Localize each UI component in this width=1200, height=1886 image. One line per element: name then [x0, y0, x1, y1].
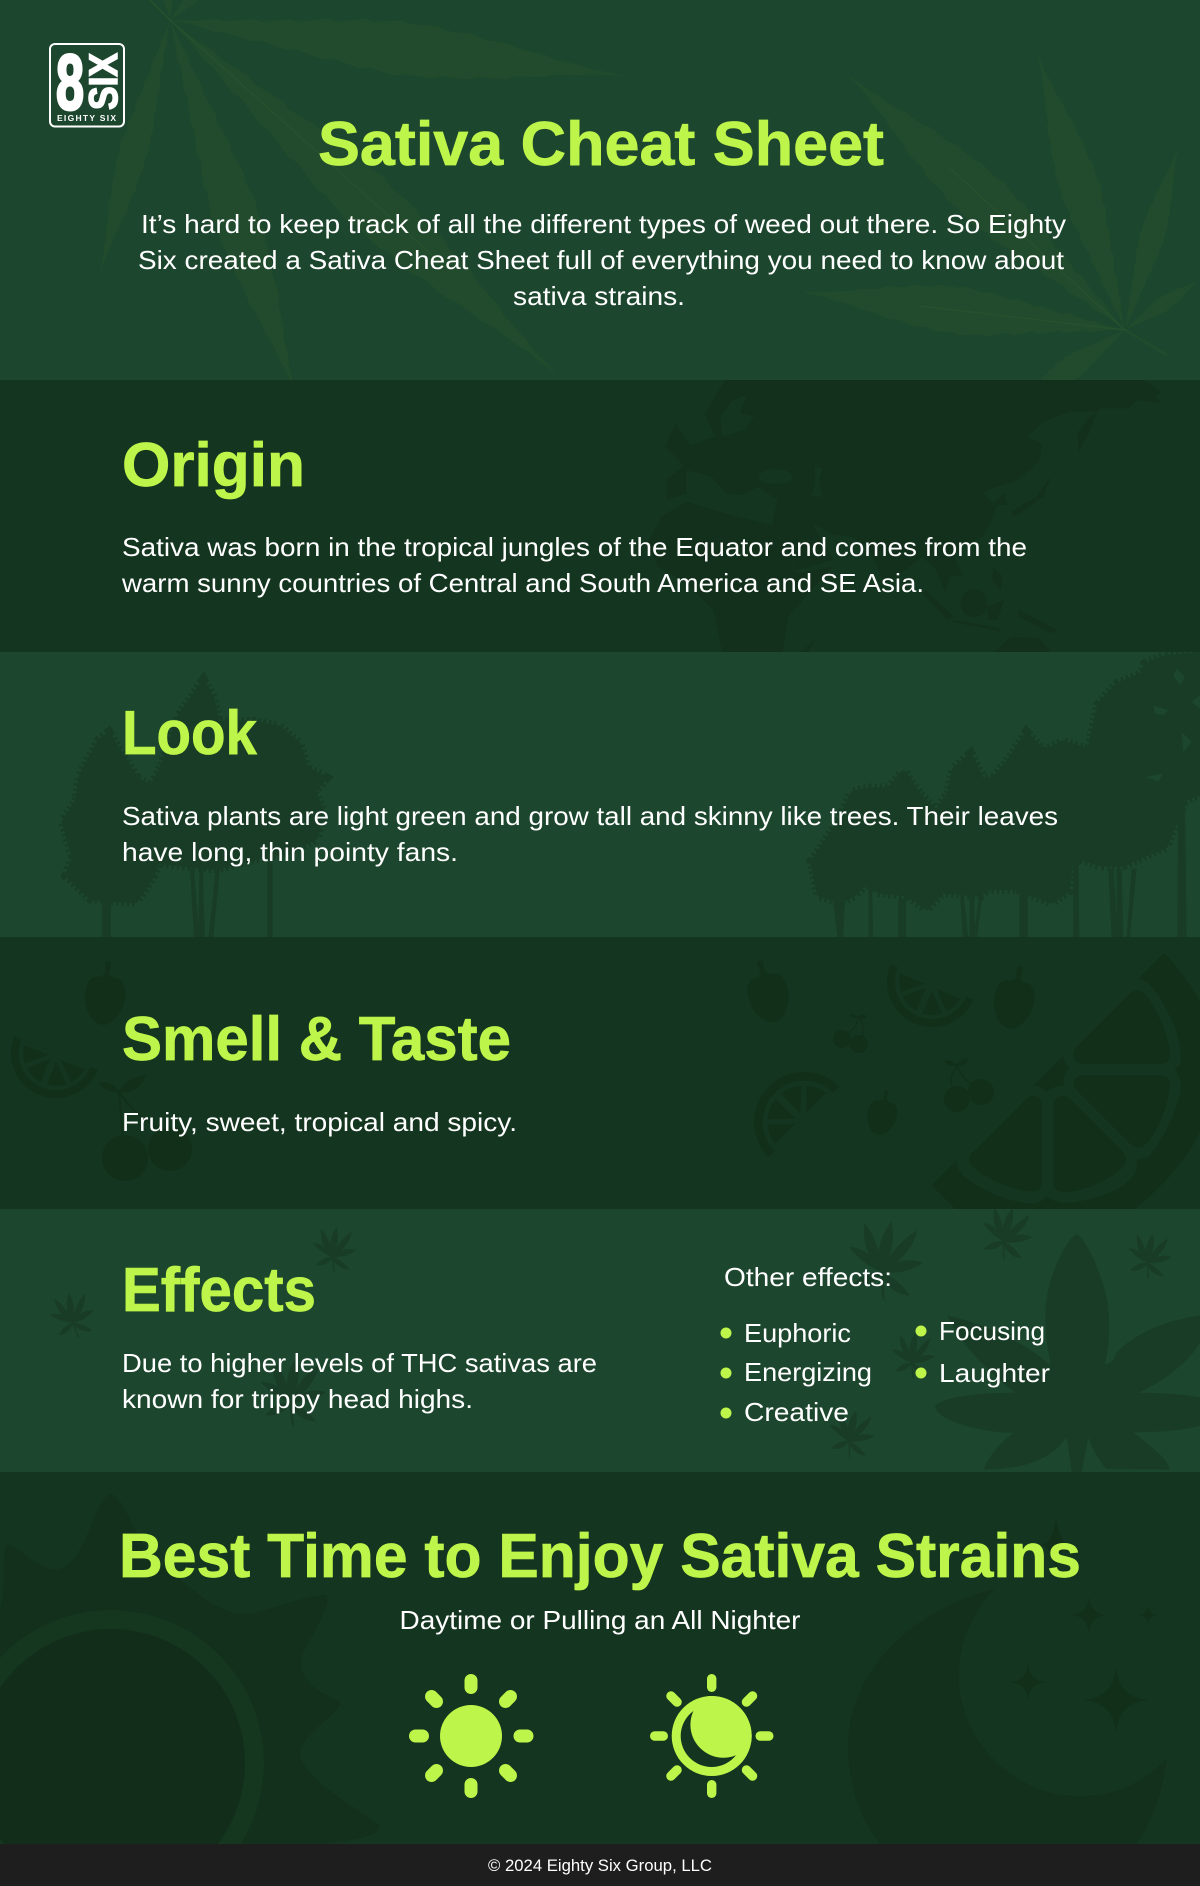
heading: Effects	[122, 1256, 316, 1325]
other effects list: Creative	[744, 1397, 849, 1427]
panel: smell and taste	[0, 937, 1200, 1209]
icon: sun	[409, 1674, 534, 1798]
other effects list: Focusing	[939, 1316, 1045, 1346]
background: sun and moon	[0, 1494, 1167, 1886]
subheading: Daytime or Pulling an All Nighter	[400, 1605, 801, 1635]
body text: Sativa plants are light green and grow tall and skinny like trees. Their leaves	[122, 801, 1058, 831]
heading: Smell & Taste	[122, 1005, 511, 1074]
heading: Best Time to Enjoy Sativa Strains	[119, 1522, 1081, 1591]
other effects list	[720, 1262, 1050, 1427]
footer	[0, 1844, 1200, 1886]
background: cannabis leaves	[85, 0, 1200, 415]
intro text: Six created a Sativa Cheat Sheet full of everything you need to know about	[138, 245, 1065, 275]
body text: Fruity, sweet, tropical and spicy.	[122, 1107, 517, 1137]
icon: sun with moon	[650, 1674, 774, 1798]
heading: Origin	[122, 431, 305, 500]
body text: Sativa was born in the tropical jungles of the Equator and comes from the	[122, 532, 1027, 562]
intro text	[138, 209, 1066, 311]
background: cannabis leaf icons	[47, 1203, 1200, 1472]
panel: effects	[0, 1203, 1200, 1472]
other effects list: Euphoric	[744, 1318, 851, 1348]
intro text: sativa strains.	[513, 281, 685, 311]
panel: look	[0, 652, 1200, 937]
body text	[121, 532, 1027, 598]
background: fruit	[425, 1765, 757, 1779]
background: trees	[65, 655, 1200, 937]
panel: origin	[0, 380, 1200, 652]
body text	[122, 1348, 597, 1414]
body text: known for trippy head highs.	[122, 1384, 473, 1414]
body text: have long, thin pointy fans.	[122, 837, 458, 867]
title: Sativa Cheat Sheet	[318, 110, 884, 179]
heading: Look	[122, 699, 257, 768]
other effects list: Other effects:	[724, 1262, 892, 1292]
body text: Due to higher levels of THC sativas are	[122, 1348, 597, 1378]
other effects list: Energizing	[744, 1357, 872, 1387]
panel: best time	[0, 1472, 1200, 1844]
body text	[122, 801, 1058, 867]
panel: header	[49, 0, 1125, 330]
body text: warm sunny countries of Central and South America and SE Asia.	[121, 568, 924, 598]
background: world map	[647, 380, 1162, 652]
logo: Eighty Six: 8	[56, 38, 84, 126]
logo: Eighty Six: SIX	[82, 53, 126, 110]
other effects list: Laughter	[939, 1358, 1050, 1388]
intro text: It’s hard to keep track of all the different types of weed out there. So Eighty	[141, 209, 1066, 239]
logo: Eighty Six	[50, 38, 126, 126]
footer: © 2024 Eighty Six Group, LLC	[488, 1856, 712, 1875]
logo: Eighty Six: EIGHTY SIX	[57, 113, 116, 123]
